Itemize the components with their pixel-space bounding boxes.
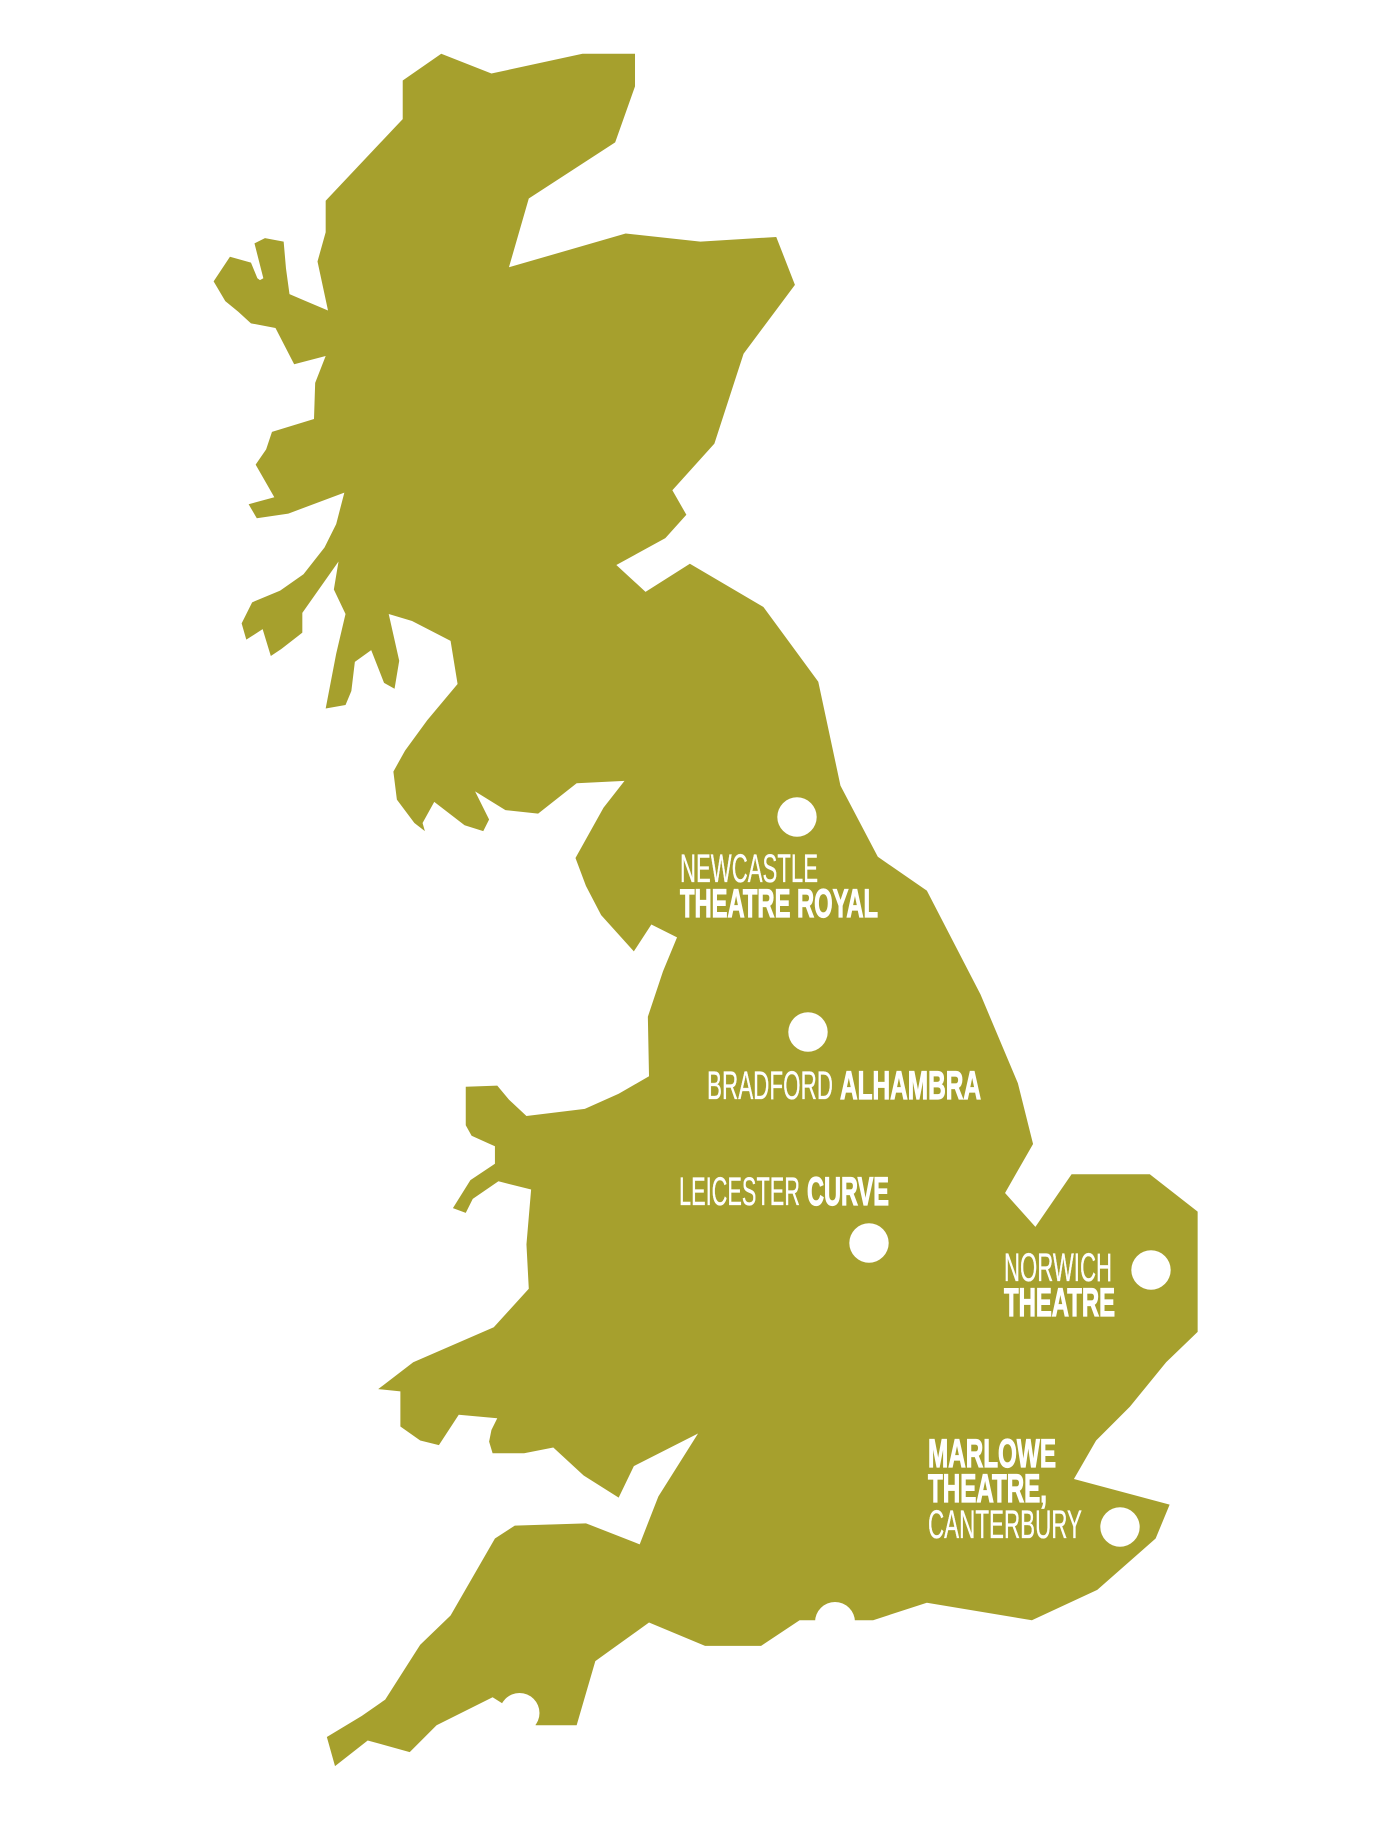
label: Marlowe Theatre, Canterbury: THEATRE, — [928, 1467, 1047, 1511]
label: Bradford Alhambra: BRADFORD — [707, 1064, 833, 1108]
dot: south coast notch — [815, 1602, 855, 1642]
label: Leicester Curve: CURVE — [807, 1170, 889, 1214]
label: Bradford Alhambra: ALHAMBRA — [840, 1064, 981, 1108]
label: Norwich Theatre: NORWICH — [1004, 1246, 1112, 1290]
label: Norwich Theatre — [1004, 1246, 1115, 1325]
label: Newcastle Theatre Royal: THEATRE ROYAL — [680, 882, 878, 926]
label: Newcastle Theatre Royal: NEWCASTLE — [680, 847, 818, 891]
dot: south-west notch — [500, 1693, 540, 1733]
label: Norwich Theatre: THEATRE — [1004, 1281, 1115, 1325]
marker: Bradford — [788, 1012, 828, 1052]
map: Great Britain silhouette — [214, 54, 1198, 1766]
marker: Norwich — [1131, 1250, 1171, 1290]
marker: Canterbury — [1100, 1507, 1140, 1547]
label: Marlowe Theatre, Canterbury — [928, 1432, 1082, 1547]
label: Marlowe Theatre, Canterbury: MARLOWE — [928, 1432, 1056, 1476]
marker: Newcastle — [777, 797, 817, 837]
marker: Leicester — [849, 1223, 889, 1263]
label: Marlowe Theatre, Canterbury: CANTERBURY — [928, 1503, 1082, 1547]
label: Newcastle Theatre Royal — [680, 847, 878, 926]
label: Leicester Curve: LEICESTER — [679, 1170, 800, 1214]
